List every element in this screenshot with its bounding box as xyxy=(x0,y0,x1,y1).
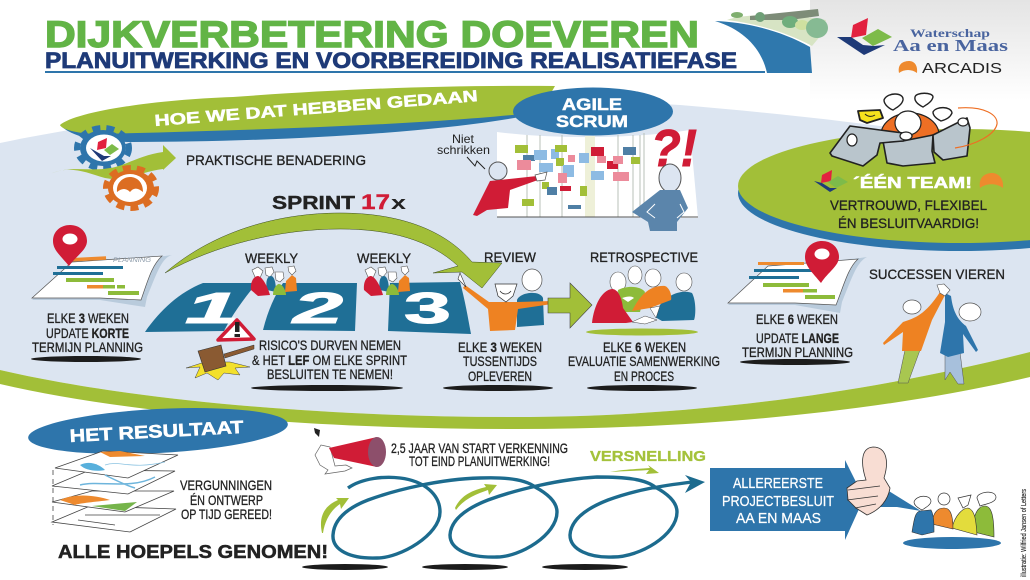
arrow: review to retrospective xyxy=(548,283,592,328)
text: risico's xyxy=(251,337,407,391)
icon: map layers xyxy=(52,451,178,532)
badge: agile scrum: SCRUM xyxy=(556,112,628,131)
arrow: allereerste projectbesluit: PROJECTBESLUIT xyxy=(722,493,834,510)
text: elke 3 weken tussentijds xyxy=(443,339,553,391)
note: niet schrikken xyxy=(437,132,490,169)
icon: small waterschap logo xyxy=(814,170,848,192)
heading: sprint 17x xyxy=(272,191,406,214)
icon: small arcadis logo xyxy=(980,173,1003,188)
icon: gavel xyxy=(186,345,254,380)
label: weekly 1: WEEKLY xyxy=(245,250,299,266)
title: PLANUITWERKING EN VOORBEREIDING REALISATIEFASE xyxy=(45,48,737,73)
logo: Waterschap Aa en Maas: Aa en Maas xyxy=(893,36,1008,55)
green swoosh under process area xyxy=(0,352,1030,429)
sprint tile 3: 3 xyxy=(404,284,451,333)
label: weekly 2: WEEKLY xyxy=(357,250,412,266)
text: elke 6 weken evaluatie: EVALUATIE SAMENWERKING xyxy=(568,353,720,369)
text: vergunningen: VERGUNNINGEN xyxy=(180,477,272,493)
icon: red question and exclamation marks: ?! xyxy=(651,120,697,178)
label: successen vieren: SUCCESSEN VIEREN xyxy=(869,266,1005,282)
text: elke 3 weken tussentijds: TUSSENTIJDS xyxy=(463,353,537,369)
label: review: REVIEW xyxy=(484,249,537,265)
arrow: small green 2 xyxy=(455,484,497,510)
figure: review presenters xyxy=(458,269,552,331)
people group weekly 1 xyxy=(251,266,297,296)
banner: hoe we dat hebben gedaan: HOE WE DAT HEBBEN GEDAAN xyxy=(154,88,478,130)
figure: team of people with speech bubbles xyxy=(830,93,997,166)
text: vergunningen: OP TIJD GEREED! xyxy=(181,506,272,522)
text: elke 6 weken evaluatie: EN PROCES xyxy=(614,368,674,384)
icon: blue gear xyxy=(77,128,129,168)
figure: retrospective team xyxy=(586,266,698,336)
icon: planning sheet short term: PLANNING xyxy=(113,258,151,264)
people group weekly 2 xyxy=(364,266,410,296)
text: elke 6 weken lange termijn xyxy=(740,311,853,365)
sprint tile 2 xyxy=(263,283,357,333)
sprint tile 1: 1 xyxy=(185,284,239,333)
icon: location pin left xyxy=(53,225,87,266)
text: elke 3 weken korte termijn xyxy=(31,310,143,362)
text: elke 3 weken korte termijn: TERMIJN PLANNING xyxy=(32,339,143,355)
text: elke 3 weken tussentijds: ELKE 3 WEKEN xyxy=(458,339,542,355)
heading: een team: ´ÉÉN TEAM! xyxy=(853,173,972,192)
text: vergunningen xyxy=(180,477,272,522)
logo: Arcadis: ARCADIS xyxy=(922,60,1002,77)
text: risico's: & HET LEF OM ELKE SPRINT xyxy=(252,352,407,368)
note: niet schrikken: schrikken xyxy=(437,143,490,157)
logo: Waterschap Aa en Maas: Waterschap xyxy=(910,28,990,40)
ground shadow 2 xyxy=(422,564,508,570)
text: elke 3 weken tussentijds: OPLEVEREN xyxy=(468,368,532,384)
text: risico's: BESLUITEN TE NEMEN! xyxy=(267,366,393,382)
text: vertrouwd, flexibel: VERTROUWD, FLEXIBEL xyxy=(830,197,987,213)
label: versnelling: VERSNELLING xyxy=(590,448,706,465)
icon: planning sheet short term xyxy=(32,255,172,307)
text: 2,5 jaar xyxy=(391,440,568,469)
chart: three hoops acceleration line xyxy=(333,475,705,558)
sprint tile 2: 2 xyxy=(291,284,344,333)
badge: agile scrum xyxy=(513,88,673,136)
logo: Arcadis xyxy=(899,60,1002,77)
text: vertrouwd, flexibel xyxy=(830,197,987,231)
logo: Waterschap Aa en Maas xyxy=(837,18,1008,55)
banner: hoe we dat hebben gedaan xyxy=(60,86,555,142)
icon: orange gear xyxy=(106,168,156,208)
badge: het resultaat xyxy=(27,402,289,460)
ground shadow 1 xyxy=(302,564,388,570)
figure: blue person watching xyxy=(632,164,688,231)
figure: four people group xyxy=(903,492,1001,549)
arrow: allereerste projectbesluit: ALLEREERSTE xyxy=(733,475,823,492)
arrow: allereerste projectbesluit: AA EN MAAS xyxy=(736,510,821,527)
figure: high five xyxy=(883,284,981,384)
arrow: allereerste projectbesluit xyxy=(710,460,864,540)
text: 2,5 jaar: 2,5 JAAR VAN START VERKENNING xyxy=(391,440,568,456)
arrow: big green sprint arc xyxy=(165,213,502,288)
heading: sprint 17x: SPRINT xyxy=(272,193,355,213)
note: niet schrikken: Niet xyxy=(452,132,475,146)
panel: light blue process area xyxy=(0,99,1030,417)
icon: location pin right xyxy=(805,241,839,283)
arrow: small green 1 xyxy=(321,498,349,533)
credit: illustratie: Wilfried Jansen of Letters xyxy=(1021,489,1028,577)
badge: agile scrum: AGILE xyxy=(562,95,622,114)
ground shadow 3 xyxy=(542,564,628,570)
icon: warning triangle xyxy=(218,320,254,340)
text: risico's: RISICO'S DURVEN NEMEN xyxy=(259,337,401,353)
sprint tile 1 xyxy=(145,283,257,333)
icon: planning sheet long term xyxy=(728,257,867,313)
text: vertrouwd, flexibel: ÉN BESLUITVAARDIG! xyxy=(838,215,979,231)
text: elke 3 weken korte termijn: ELKE 3 WEKEN xyxy=(47,310,129,326)
panel: een team xyxy=(738,93,1030,251)
text: elke 6 weken lange termijn: ELKE 6 WEKEN xyxy=(756,311,838,327)
title xyxy=(45,14,765,73)
sticky notes xyxy=(515,145,640,209)
text: elke 6 weken evaluatie xyxy=(568,339,720,391)
label: praktische benadering: PRAKTISCHE BENADERING xyxy=(186,152,366,168)
heading: sprint 17x: x xyxy=(391,193,406,213)
text: 2,5 jaar: TOT EIND PLANUITWERKING! xyxy=(409,453,550,469)
figure: red person pointing xyxy=(473,162,547,216)
arrow: green wave xyxy=(50,145,176,179)
icon: dike landscape xyxy=(715,9,828,73)
text: elke 3 weken korte termijn: UPDATE KORTE xyxy=(46,325,129,341)
heading: sprint 17x: 17 xyxy=(361,191,390,214)
text: elke 6 weken lange termijn: TERMIJN PLANNING xyxy=(742,344,853,360)
sprint tile 3 xyxy=(388,282,471,334)
text: vergunningen: ÉN ONTWERP xyxy=(190,492,263,508)
title: DIJKVERBETERING DOEVEREN xyxy=(45,14,699,55)
text: elke 6 weken evaluatie: ELKE 6 WEKEN xyxy=(603,339,686,355)
arrow: small green 3 xyxy=(610,465,659,474)
icon: megaphone with person xyxy=(314,428,386,474)
text: elke 6 weken lange termijn: UPDATE LANGE xyxy=(756,330,839,346)
heading: alle hoepels genomen: ALLE HOEPELS GENOMEN! xyxy=(58,542,328,562)
badge: het resultaat: HET RESULTAAT xyxy=(69,417,244,446)
icon: thumbs up xyxy=(847,447,921,515)
label: retrospective: RETROSPECTIVE xyxy=(590,249,698,265)
panel: scrum board xyxy=(497,130,698,218)
